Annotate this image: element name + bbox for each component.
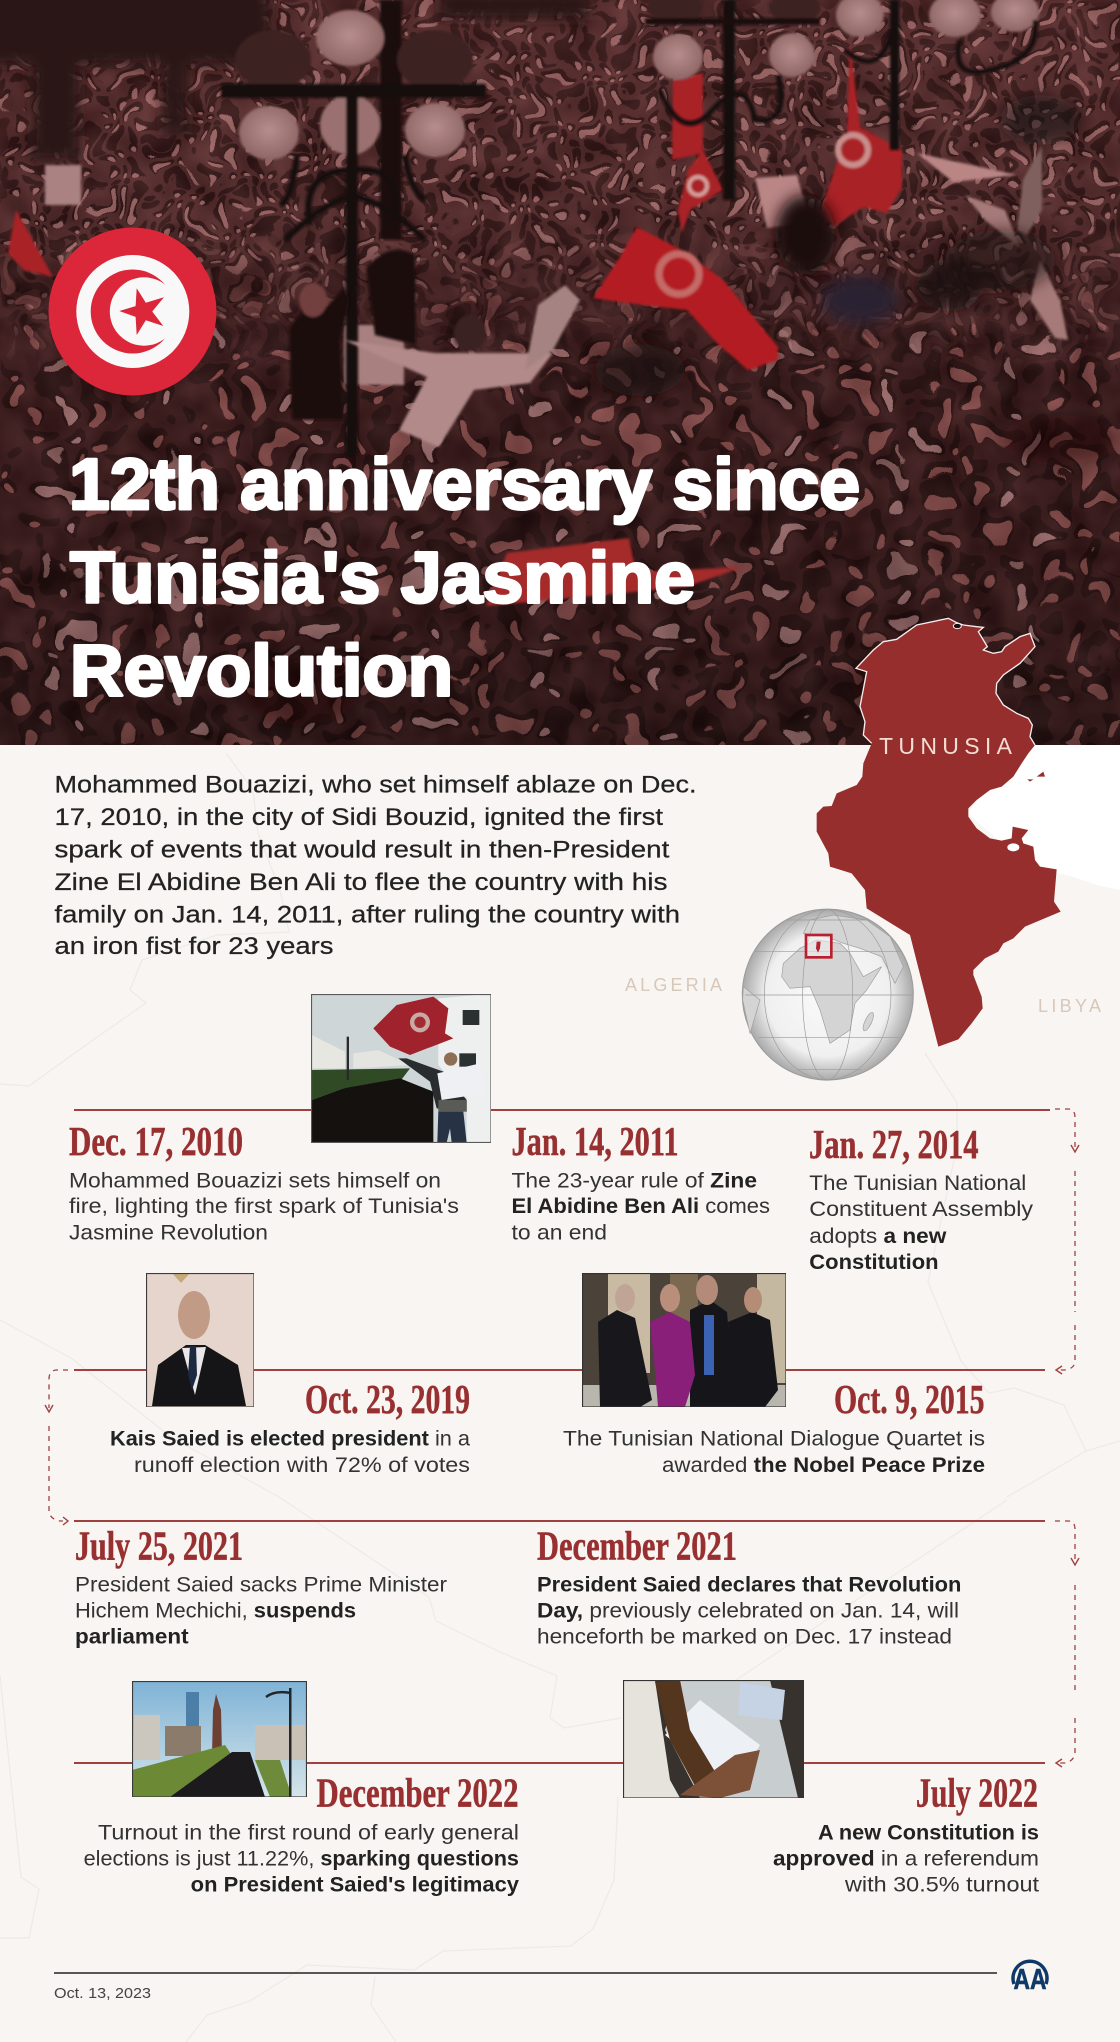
intro paragraph: spark of events that would result in then-President <box>54 836 670 863</box>
event: Dec. 17, 2010: Dec. 17, 2010 <box>69 1118 243 1164</box>
intro paragraph <box>54 772 696 960</box>
footer rule and date: Oct. 13, 2023 <box>54 1985 151 2002</box>
country labels: Algeria and Libya: LIBYA <box>1038 996 1101 1016</box>
title: 12th anniversary since <box>69 445 860 525</box>
event: December 2022: December 2022 <box>316 1770 518 1816</box>
event: December 2022: elections is just 11.22%, sparking questions <box>84 1847 519 1870</box>
event: December 2022: Turnout in the first round of early general <box>98 1821 519 1844</box>
event: Oct. 23, 2019: Kais Saied is elected president in a <box>110 1428 470 1451</box>
locator globe <box>742 909 913 1080</box>
label: Tunusia: TUNUSIA <box>879 733 1013 759</box>
event: July 25, 2021: Hichem Mechichi, suspends <box>75 1600 356 1622</box>
country labels: Algeria and Libya: ALGERIA <box>625 975 722 995</box>
event: Oct. 9, 2015: Oct. 9, 2015 <box>834 1376 984 1422</box>
event: Oct. 9, 2015: awarded the Nobel Peace Prize <box>662 1454 985 1477</box>
timeline line 1 with connector <box>74 1109 1079 1374</box>
event: Oct. 9, 2015 <box>563 1376 985 1477</box>
event: December 2021: Day, previously celebrated on Jan. 14, will <box>537 1600 959 1622</box>
event: December 2022 <box>84 1770 519 1896</box>
photo: counting ballots <box>623 1680 804 1798</box>
timeline line 2 with connector <box>45 1370 1045 1525</box>
intro paragraph: 17, 2010, in the city of Sidi Bouzid, ignited the first <box>54 804 663 831</box>
event: July 2022: approved in a referendum <box>773 1847 1039 1870</box>
protesters climbing the lamp post <box>289 250 580 447</box>
logo: Anadolu Agency: AA <box>1014 1964 1047 1996</box>
title: Tunisia's Jasmine <box>70 538 695 618</box>
event: December 2021: December 2021 <box>537 1522 737 1568</box>
dark clusters in the crowd <box>240 95 1120 725</box>
event: Oct. 23, 2019: Oct. 23, 2019 <box>305 1376 470 1422</box>
country labels: Algeria and Libya <box>625 975 1101 1016</box>
event: Dec. 17, 2010 <box>69 1118 459 1244</box>
photo: Tunis avenue <box>132 1681 307 1797</box>
event: Jan. 14, 2011 <box>512 1118 770 1244</box>
left street lamp <box>221 0 486 455</box>
event: Jan. 27, 2014: Constituent Assembly <box>809 1198 1034 1221</box>
event: July 2022: A new Constitution is <box>818 1821 1039 1844</box>
event: Jan. 27, 2014 <box>809 1121 1034 1274</box>
event: July 2022: July 2022 <box>916 1770 1038 1816</box>
event: July 25, 2021: July 25, 2021 <box>75 1522 243 1568</box>
flag of Tunisia badge <box>48 228 216 396</box>
event: Jan. 14, 2011: to an end <box>512 1222 607 1244</box>
photo: National Dialogue Quartet <box>582 1273 786 1407</box>
event: December 2021: President Saied declares that Revolution <box>537 1574 961 1597</box>
event: Jan. 27, 2014: The Tunisian National <box>809 1172 1026 1195</box>
event: Jan. 14, 2011: Jan. 14, 2011 <box>512 1118 678 1164</box>
Tunisia map silhouette <box>817 618 1061 1047</box>
intro paragraph: family on Jan. 14, 2011, after ruling the country with <box>54 902 680 929</box>
event: Dec. 17, 2010: Jasmine Revolution <box>69 1222 268 1244</box>
event: Oct. 9, 2015: The Tunisian National Dialogue Quartet is <box>563 1428 985 1451</box>
intro paragraph: Zine El Abidine Ben Ali to flee the country with his <box>54 869 668 896</box>
event: July 25, 2021: parliament <box>75 1626 189 1648</box>
event: Jan. 27, 2014: Constitution <box>809 1251 939 1274</box>
hero photo: protest crowd <box>0 0 1120 745</box>
intro paragraph: Mohammed Bouazizi, who set himself ablaze on Dec. <box>54 772 696 799</box>
event: July 25, 2021 <box>75 1522 447 1648</box>
event: July 25, 2021: President Saied sacks Prime Minister <box>75 1574 447 1597</box>
white sea area <box>967 745 1120 890</box>
timeline line 4 <box>74 1762 1045 1764</box>
event: Jan. 14, 2011: The 23-year rule of Zine <box>512 1169 757 1192</box>
event: Jan. 27, 2014: adopts a new <box>809 1225 947 1248</box>
photo: Kais Saied <box>146 1273 254 1407</box>
faint background map borders <box>0 753 1120 2042</box>
page background <box>0 745 1120 2042</box>
event: Oct. 23, 2019 <box>110 1376 470 1477</box>
title <box>69 445 860 712</box>
event: December 2022: on President Saied's legitimacy <box>191 1873 519 1896</box>
title: Revolution <box>70 632 453 712</box>
right street lamps <box>645 0 1039 200</box>
banners and placards <box>45 145 1068 385</box>
event: July 2022: with 30.5% turnout <box>844 1873 1039 1896</box>
timeline line 3 with connector <box>74 1521 1079 1767</box>
event: July 2022 <box>773 1770 1039 1896</box>
event: Jan. 14, 2011: El Abidine Ben Ali comes <box>512 1195 770 1218</box>
dark trees, top left <box>0 0 590 160</box>
event: December 2021: henceforth be marked on Dec. 17 instead <box>537 1626 952 1648</box>
event: Jan. 27, 2014: Jan. 27, 2014 <box>809 1121 978 1167</box>
intro paragraph: an iron fist for 23 years <box>54 933 334 960</box>
event: December 2021 <box>537 1522 961 1648</box>
photo: flag over crowd <box>311 994 492 1143</box>
event: Oct. 23, 2019: runoff election with 72% of votes <box>134 1454 470 1477</box>
event: Dec. 17, 2010: fire, lighting the first spark of Tunisia's <box>69 1195 459 1218</box>
red flags in the crowd <box>8 43 902 606</box>
event: Dec. 17, 2010: Mohammed Bouazizi sets himself on <box>69 1169 441 1192</box>
